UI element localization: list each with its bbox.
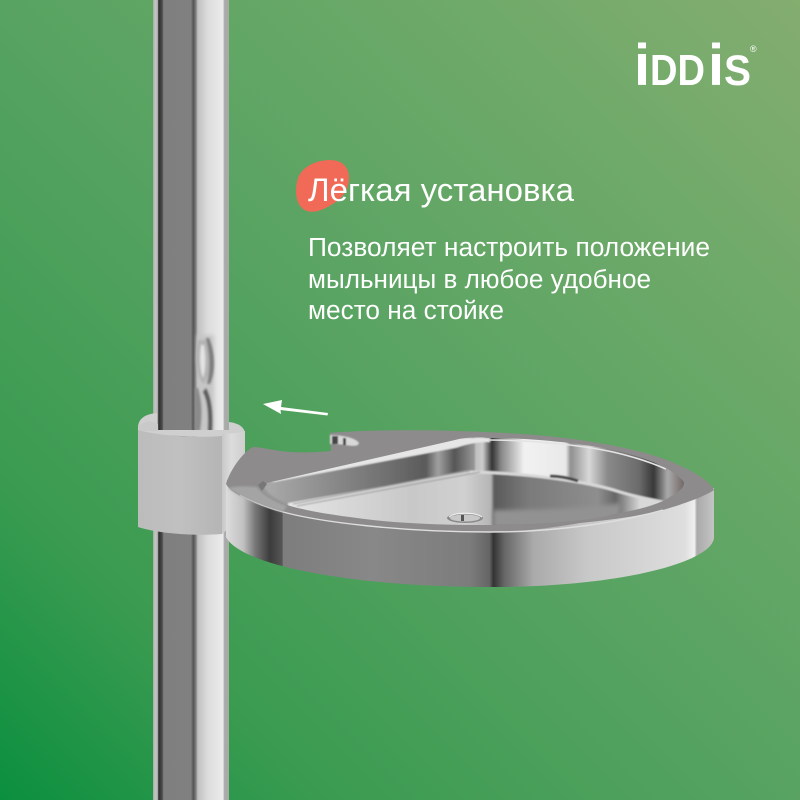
heading: Лёгкая установка bbox=[308, 172, 574, 208]
lower floor lip bbox=[493, 502, 620, 525]
floor ring highlight bbox=[470, 472, 663, 502]
left inner wall bbox=[262, 436, 475, 503]
description text bbox=[308, 234, 710, 325]
left corner glint bbox=[258, 481, 267, 491]
IDDIS logo: S bbox=[724, 47, 751, 95]
arrow pointing to the pole bbox=[263, 400, 328, 416]
front lip highlight bbox=[240, 495, 663, 532]
soap dish tray bbox=[226, 430, 714, 587]
bowl blurred shading bbox=[262, 437, 684, 525]
left lip light shading bbox=[228, 486, 287, 512]
description text: место на стойке bbox=[308, 297, 504, 325]
plastic clamp bbox=[138, 413, 245, 535]
clamp front face bbox=[138, 430, 222, 535]
mounting slot bbox=[330, 435, 359, 446]
floor groove lines bbox=[293, 470, 480, 506]
floor ring shadow bbox=[550, 476, 578, 481]
IDDIS logo: DD bbox=[650, 46, 705, 95]
IDDIS logo bbox=[634, 33, 757, 98]
bowl back wall bbox=[262, 437, 684, 505]
clamp upper ring back bbox=[138, 413, 245, 530]
white highlight band on left wall bbox=[264, 438, 490, 482]
description text: Позволяет настроить положение bbox=[308, 234, 710, 262]
IDDIS logo: i bbox=[634, 33, 650, 98]
clamp ring ledge bbox=[139, 421, 158, 431]
tray top face bbox=[226, 430, 714, 532]
description text: мыльницы в любое удобное bbox=[308, 266, 651, 294]
tray outer side wall bbox=[226, 484, 714, 587]
bowl interior bbox=[262, 437, 684, 525]
pole reflection bbox=[195, 335, 214, 432]
right upper rim highlight bbox=[490, 440, 666, 469]
IDDIS logo: ® bbox=[750, 44, 757, 54]
IDDIS logo: i bbox=[708, 33, 724, 98]
chrome shower pole bbox=[153, 0, 229, 800]
clamp side face bbox=[222, 431, 245, 534]
bowl floor bbox=[288, 471, 663, 530]
coral accent blob bbox=[296, 160, 349, 212]
drain hole bbox=[447, 513, 483, 523]
